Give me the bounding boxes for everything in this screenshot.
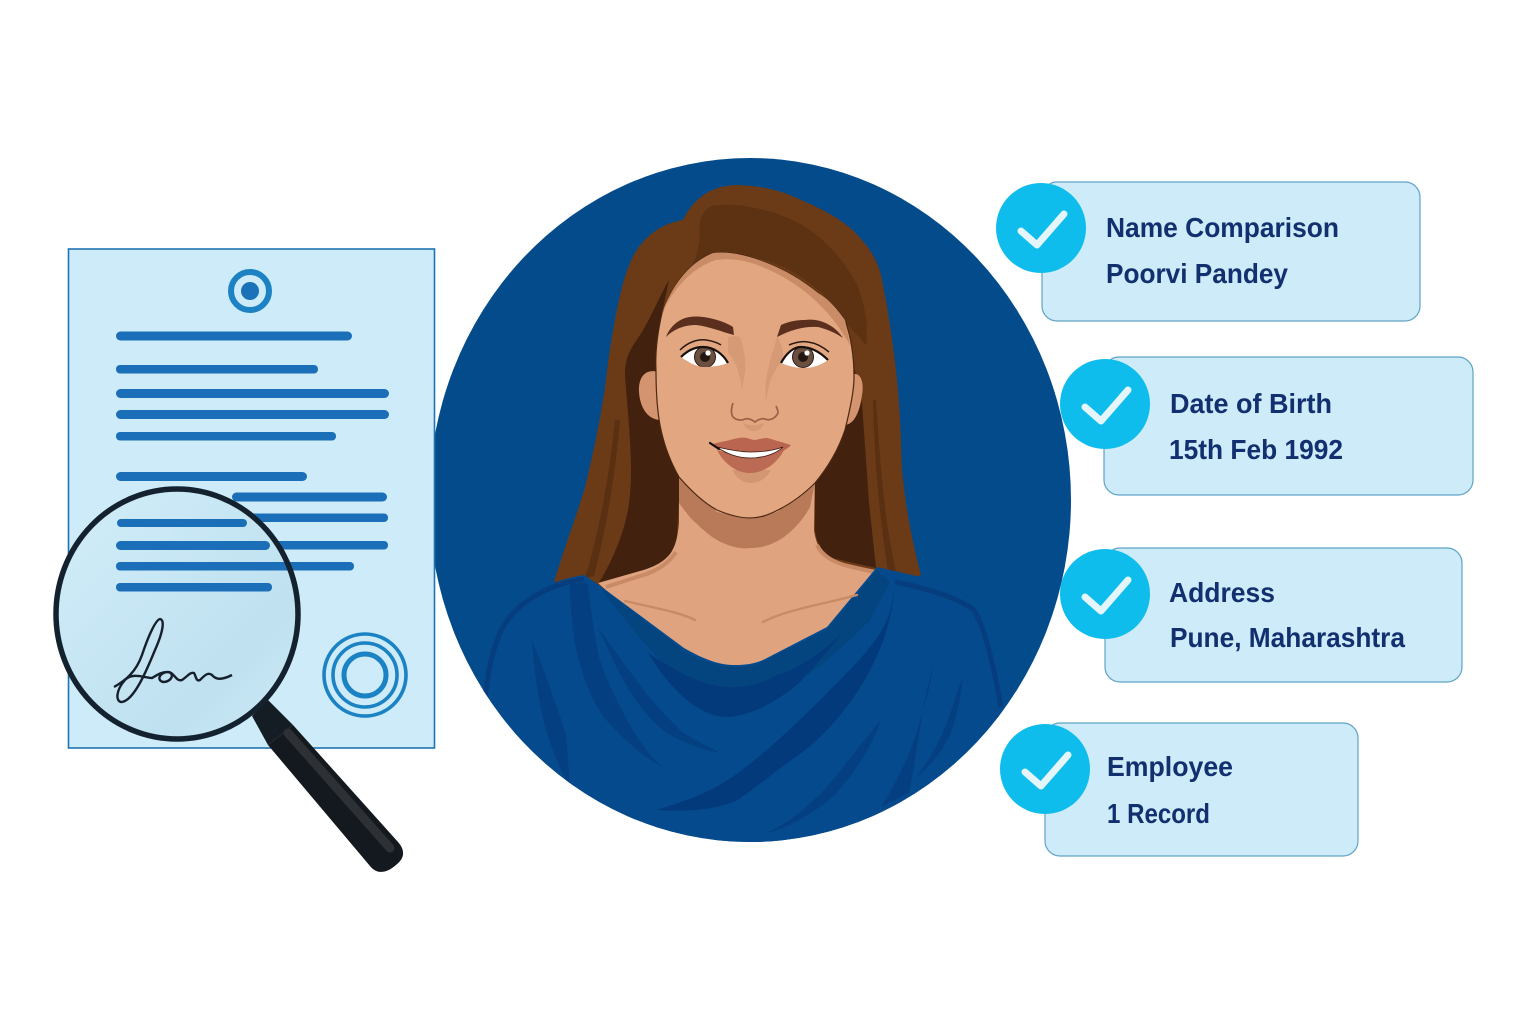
blue circle background (429, 158, 1071, 842)
text lines (116, 332, 389, 570)
document (68, 249, 434, 748)
neck (598, 470, 876, 672)
check icon (996, 183, 1086, 273)
nose shadow (728, 336, 783, 403)
label: Address (1169, 577, 1275, 608)
portrait circle with person (429, 158, 1071, 860)
lens (56, 489, 298, 739)
handle (252, 700, 403, 872)
card: employee (1000, 723, 1358, 856)
label: Date of Birth (1170, 388, 1332, 419)
signature (114, 619, 232, 702)
value: Poorvi Pandey (1106, 258, 1288, 289)
value: 1 Record (1107, 798, 1210, 829)
label: Employee (1107, 751, 1233, 782)
ears (639, 371, 863, 425)
lens ring (56, 489, 298, 739)
magnifying glass (56, 489, 403, 872)
card: name comparison (996, 182, 1420, 321)
check icon (1060, 359, 1150, 449)
hair (554, 185, 921, 600)
card: address (1060, 548, 1462, 682)
blue draped top (483, 567, 1005, 842)
forehead shadow edge (662, 253, 850, 345)
paper (68, 249, 434, 748)
face (656, 253, 854, 518)
mouth (710, 438, 791, 483)
collarbones (625, 595, 857, 622)
document seal icon (231, 272, 269, 310)
left eye (680, 340, 728, 368)
value: Pune, Maharashtra (1170, 622, 1405, 653)
label: Name Comparison (1106, 212, 1339, 243)
card: date of birth (1060, 357, 1473, 495)
stamp (324, 634, 406, 716)
value: 15th Feb 1992 (1169, 434, 1343, 465)
right eye (781, 342, 829, 368)
neck shadow (679, 477, 815, 548)
check icon (1000, 724, 1090, 814)
check icon (1060, 549, 1150, 639)
nose (732, 403, 778, 431)
left eyebrow (666, 317, 734, 337)
neck edge shading (606, 545, 874, 587)
lines in lens (116, 519, 288, 592)
right eyebrow (777, 320, 843, 338)
